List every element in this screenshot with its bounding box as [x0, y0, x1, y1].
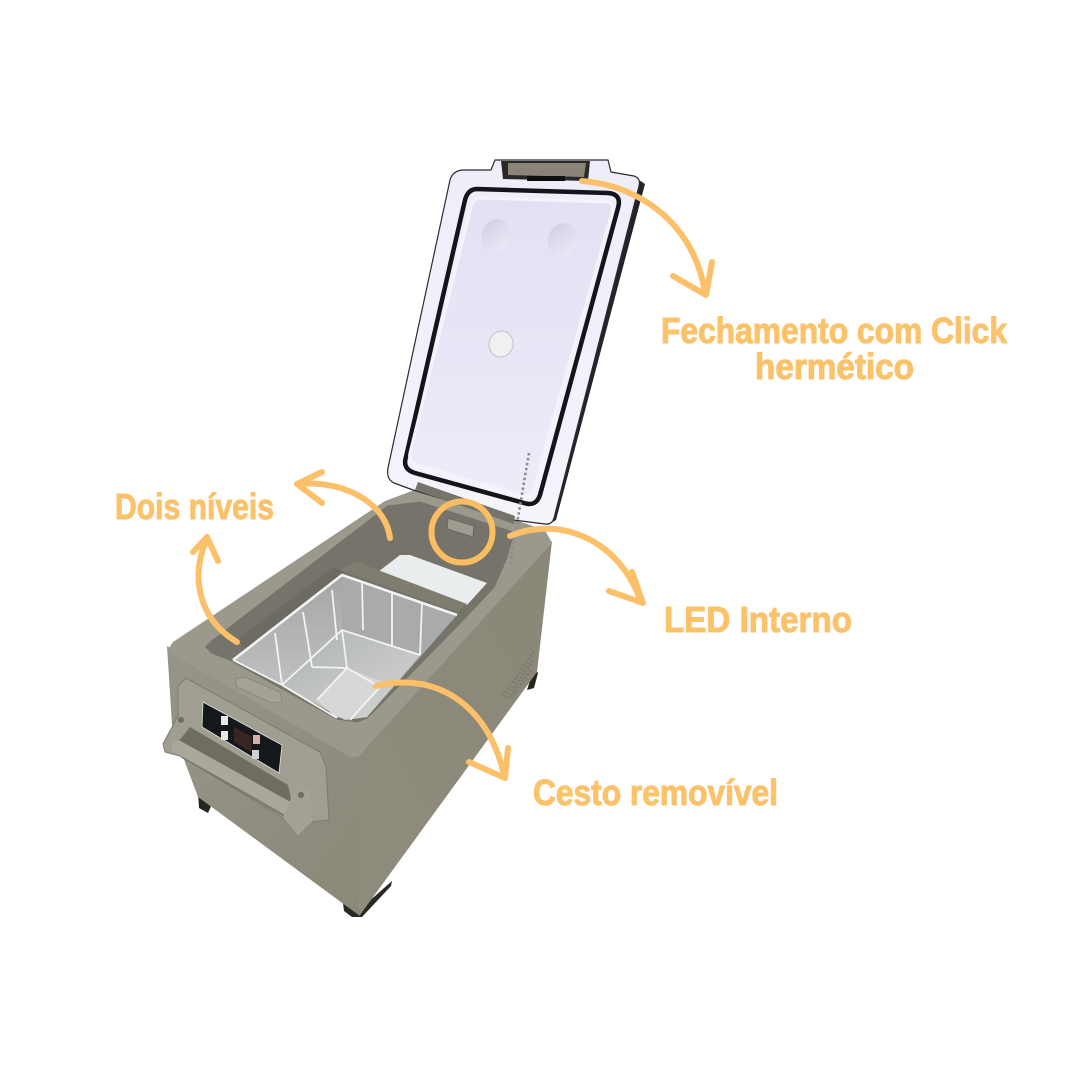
well ledge highlight — [237, 567, 345, 652]
label: closure second line: hermético — [755, 346, 914, 387]
handle plate — [163, 678, 329, 836]
lid dark edge — [548, 178, 645, 525]
highlight circle: LED — [432, 502, 492, 562]
body: front face — [167, 646, 360, 916]
handle bar — [178, 747, 288, 808]
red display — [234, 727, 252, 752]
basket left wall — [233, 575, 342, 685]
basket front strip — [233, 630, 420, 720]
lid — [388, 160, 645, 565]
screw right — [298, 792, 304, 798]
down button — [221, 731, 228, 740]
foot: back right — [527, 668, 538, 690]
label: internal LED: LED Interno — [664, 599, 852, 640]
cooler box product — [163, 160, 645, 917]
arrow: internal LED — [510, 529, 643, 603]
arrow: removable basket — [376, 682, 508, 778]
white tray — [378, 555, 487, 605]
handle bar shadow — [182, 757, 286, 817]
arrow: upper level — [297, 472, 390, 538]
lid recess left — [478, 216, 514, 256]
hinge plate — [501, 161, 590, 181]
lid round pad — [486, 328, 516, 360]
label: two levels: Dois níveis — [115, 486, 274, 527]
basket back wall — [342, 575, 457, 655]
vent grille — [503, 650, 535, 698]
LED display — [447, 518, 474, 537]
basket wires — [233, 575, 457, 720]
basket floor — [282, 630, 420, 720]
up button — [221, 716, 228, 725]
inner well — [207, 503, 513, 721]
handle recess — [178, 727, 292, 803]
foot: front left — [198, 792, 212, 813]
handle ear right — [283, 783, 312, 836]
panel background — [202, 702, 282, 773]
hinge slot — [527, 176, 565, 181]
lid outer — [388, 160, 639, 524]
lid recess right — [544, 220, 582, 260]
hinge base — [415, 482, 515, 524]
lid inner panel — [410, 198, 613, 496]
label: removable basket: Cesto removível — [533, 772, 778, 813]
mode button — [252, 750, 259, 759]
arrow: lid closure — [582, 181, 712, 295]
screw left — [178, 717, 184, 723]
foot: bottom corner — [343, 881, 392, 917]
power button — [253, 735, 260, 744]
lid gasket — [405, 189, 619, 504]
wire basket — [233, 575, 457, 720]
label: closure: Fechamento com Click — [661, 310, 1008, 351]
basket divider bar — [340, 562, 467, 612]
control panel — [202, 702, 282, 773]
basket floor plate — [317, 668, 385, 719]
top rim — [167, 488, 552, 757]
handle assembly — [163, 678, 329, 836]
front latch — [235, 677, 282, 703]
lid chain — [510, 453, 529, 565]
body: right face — [355, 541, 552, 915]
basket right wall — [367, 615, 457, 717]
hinge insert — [508, 163, 586, 177]
arrow: lower level — [193, 537, 237, 642]
